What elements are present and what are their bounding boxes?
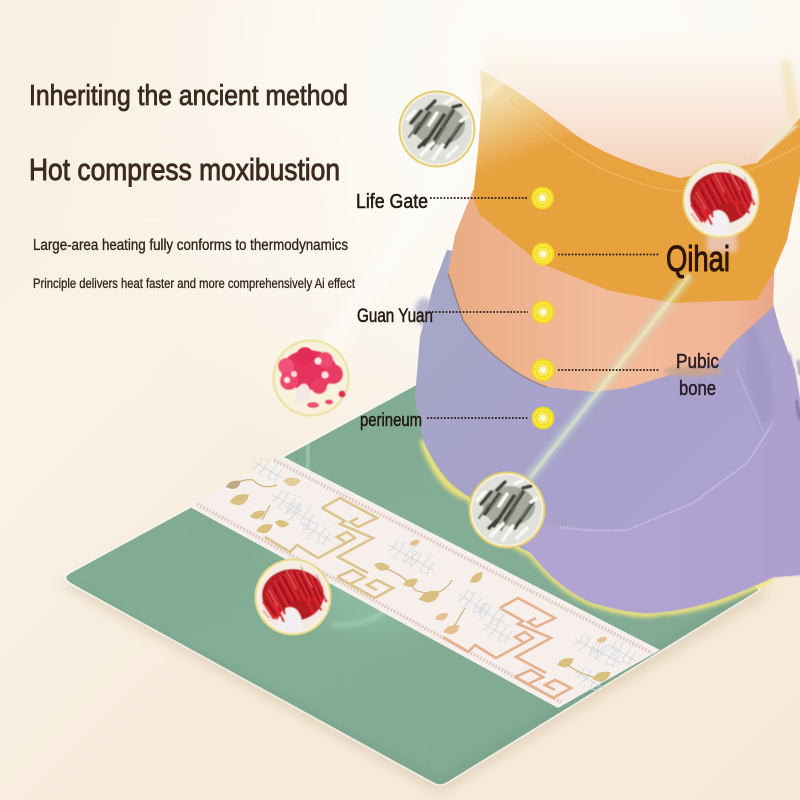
acupoint marker: Guan Yuan <box>532 301 554 323</box>
acupoint marker: Pubic bone <box>532 359 554 381</box>
upper chest skin <box>482 20 800 190</box>
retouch smudge near Guan Yuan <box>415 298 433 326</box>
skin waist <box>448 160 800 392</box>
mat base <box>66 355 760 785</box>
acupoint marker: perineum <box>532 407 554 429</box>
label: Life Gate: Life Gate <box>356 191 428 213</box>
acupoint marker: Life Gate <box>531 187 554 209</box>
band borders <box>197 460 652 702</box>
lavender shorts <box>415 250 800 613</box>
golden leaves and branches <box>226 474 610 682</box>
neckline stitching <box>510 100 800 191</box>
label: Pubic bone: Pubic <box>676 351 719 373</box>
mat shadow <box>60 370 770 795</box>
label: perineum: perineum <box>360 410 422 430</box>
decorative band <box>190 455 660 708</box>
heading: Inheriting the ancient method: Inheriting the ancient method <box>29 80 348 112</box>
pale strap base <box>755 125 800 163</box>
pale light beam behind the body <box>330 120 480 350</box>
herb medallion: saffron on mat <box>255 560 331 641</box>
shorts seams and folds <box>560 320 800 531</box>
retouch stub below red medallion <box>707 232 737 252</box>
greek key ornament, gold <box>265 498 393 598</box>
greek key ornament, copper <box>443 598 571 698</box>
herb medallion: silver upper <box>400 92 474 166</box>
text: large-area heating: Large-area heating fully conforms to thermodynamics <box>33 237 348 254</box>
retouch smudge near Pubic <box>663 366 723 376</box>
upper beam over the top <box>485 50 530 97</box>
ribbing <box>473 135 800 303</box>
orange sports top <box>473 70 800 303</box>
mat grain and glow <box>68 391 757 785</box>
label: Pubic bone: bone <box>679 378 716 400</box>
pale floral sprigs <box>253 458 636 692</box>
waistband shadow <box>448 273 547 387</box>
label: Pubic bone <box>676 351 719 400</box>
text: principle delivers heat: Principle delivers heat faster and more comprehensively Ai effect <box>33 276 355 291</box>
heading: Hot compress moxibustion: Hot compress moxibustion <box>29 152 340 187</box>
heating mat <box>64 385 762 786</box>
band base <box>190 455 660 708</box>
shoulder strap <box>780 60 800 125</box>
herb medallion: silver on seat <box>470 472 544 548</box>
top base <box>473 70 800 303</box>
yellow glow along the seat <box>423 440 773 614</box>
diagonal light beam across the body <box>520 275 690 490</box>
lower thigh panel <box>500 350 800 613</box>
herb medallion: saffron upper right <box>683 162 759 244</box>
label: Guan Yuan: Guan Yuan <box>357 306 433 327</box>
label: Qihai: Qihai <box>666 238 730 279</box>
acupoint marker: Qihai <box>532 243 554 265</box>
dotted leader lines <box>427 198 660 418</box>
herb medallion: pink petals <box>274 340 348 416</box>
figure <box>415 20 800 613</box>
